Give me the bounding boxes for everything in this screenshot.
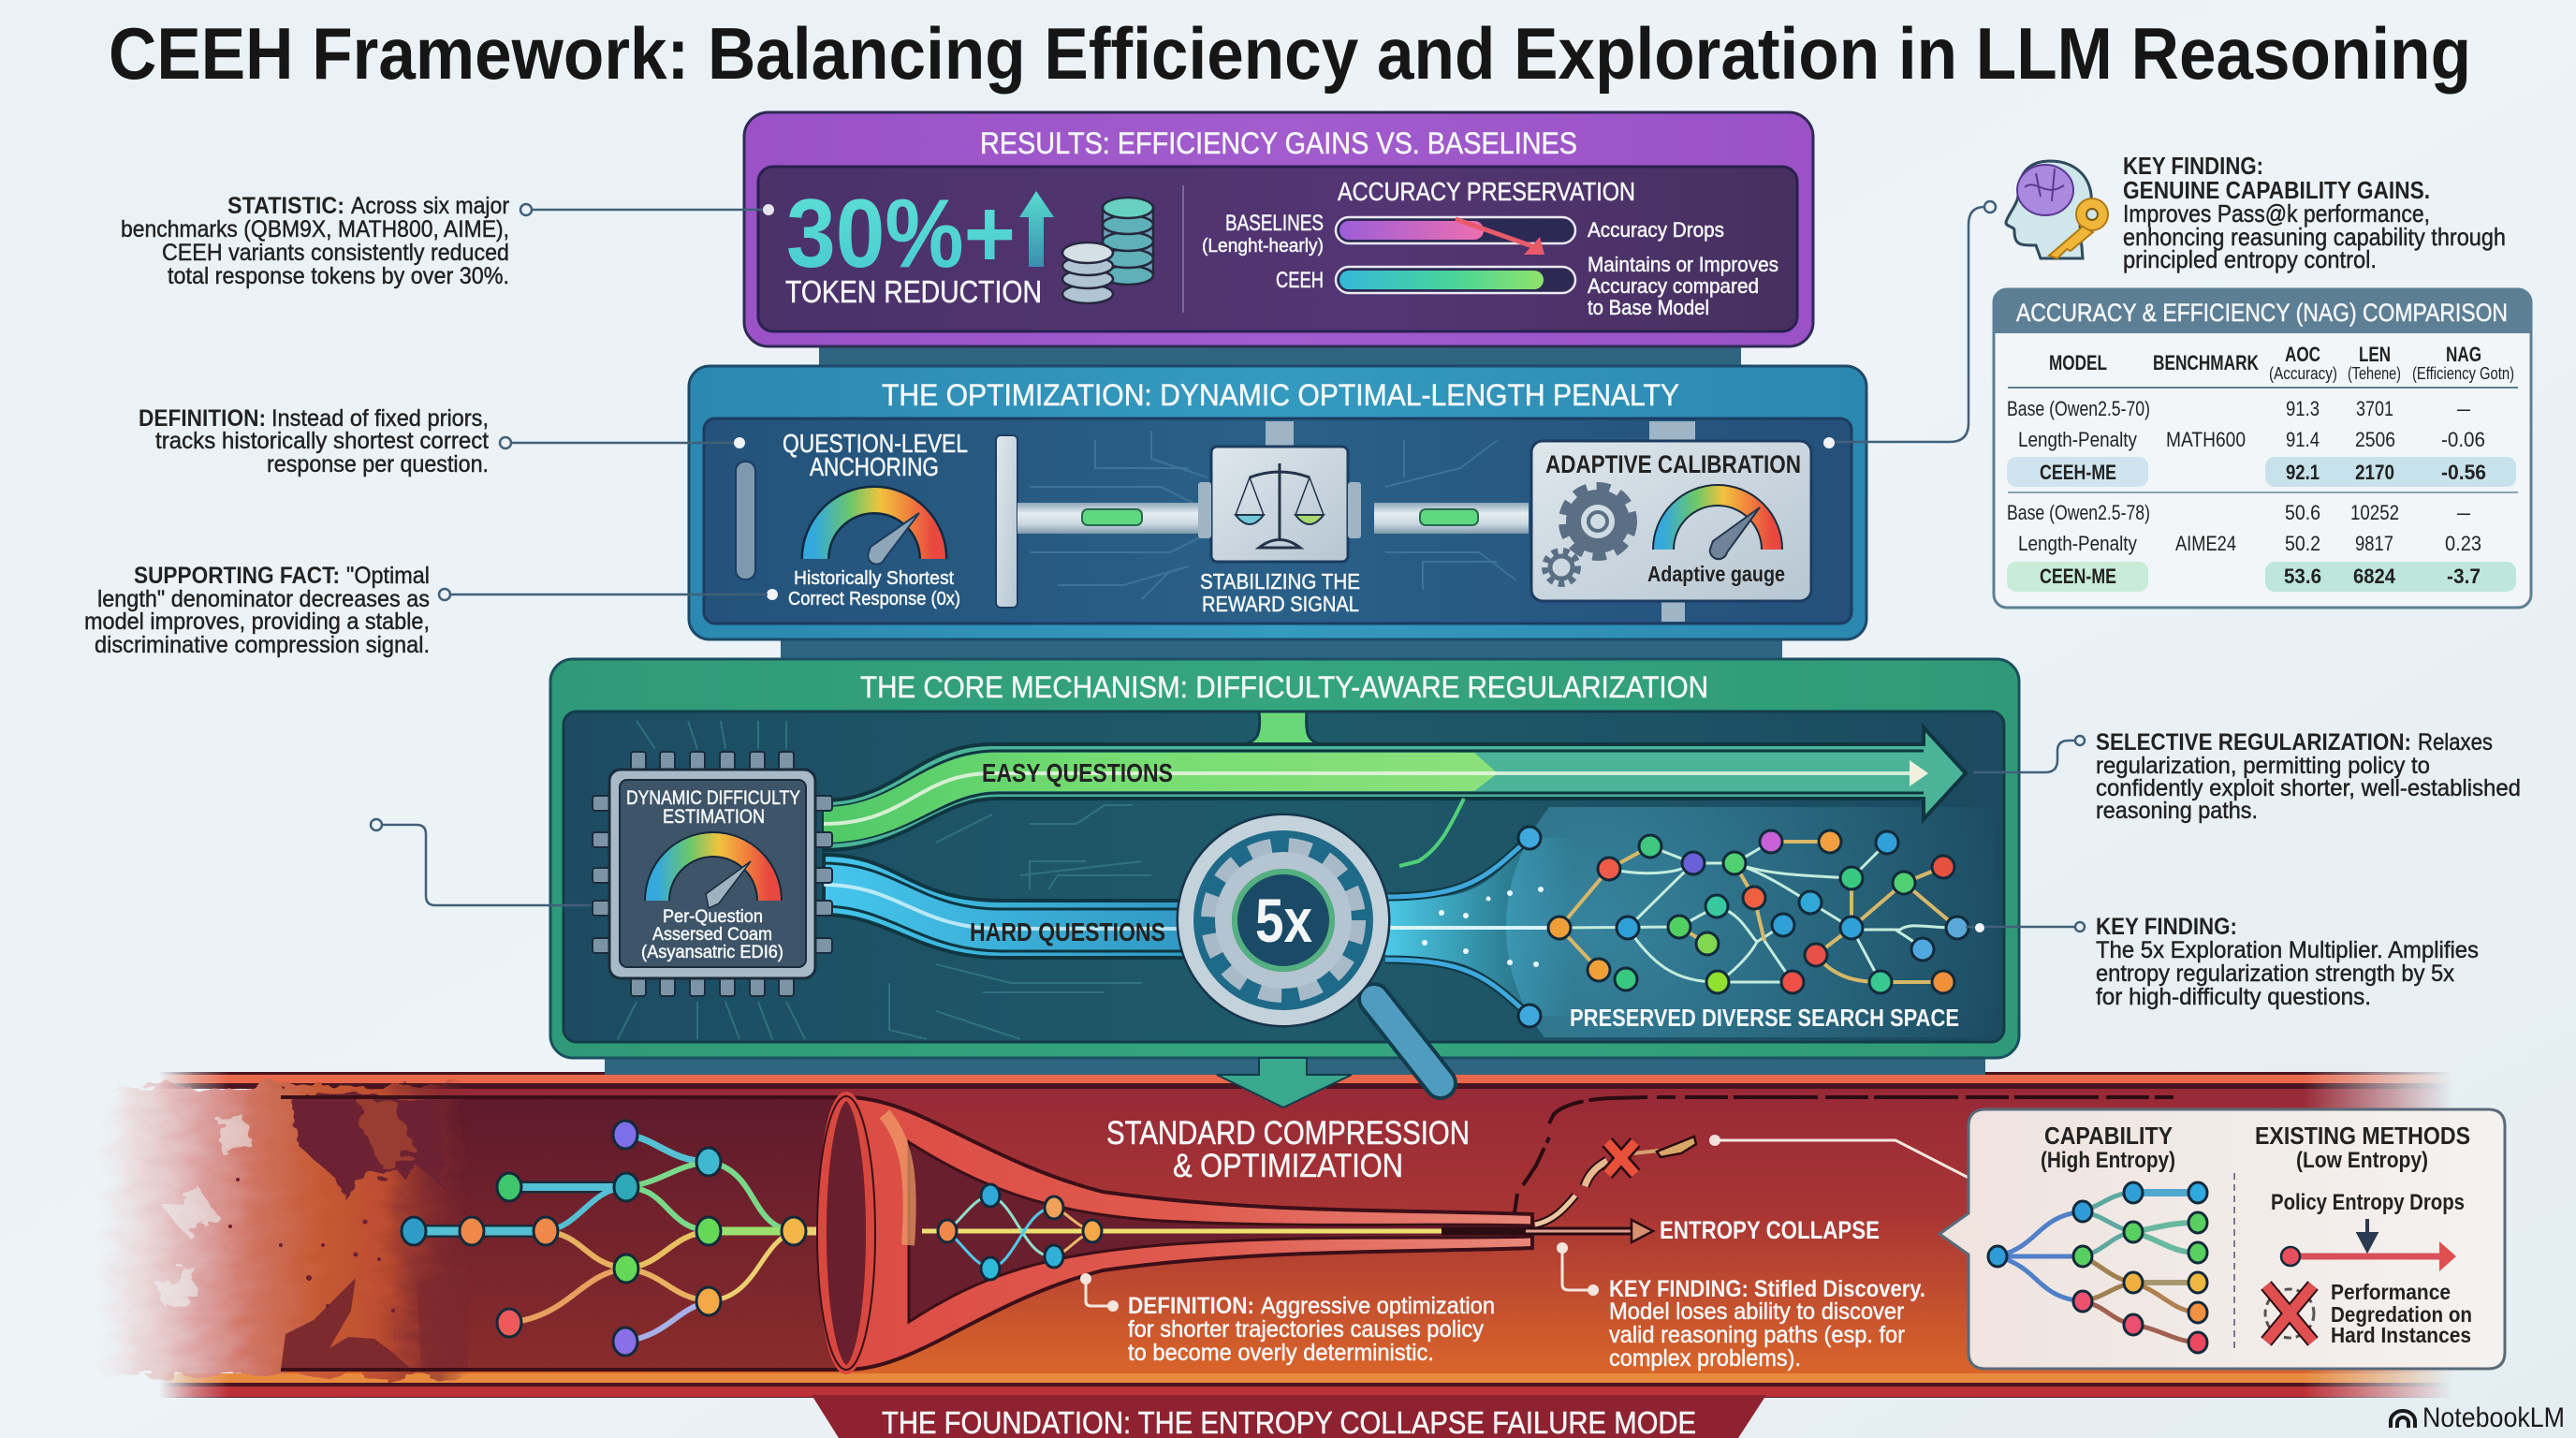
heading: optimization: THE OPTIMIZATION: DYNAMIC OPTIMAL-LENGTH PENALTY	[882, 378, 1679, 412]
glow behind graph	[1506, 807, 1998, 1037]
connector: difficulty estimation	[371, 819, 592, 905]
callout: key finding stifled discovery: valid reasoning paths (esp. for	[1609, 1322, 1905, 1348]
callout: statistic: Across six major	[351, 193, 509, 219]
bar: baselines accuracy	[1336, 217, 1575, 255]
heading: question-level anchoring: ANCHORING	[810, 452, 939, 481]
callout: statistic: total response tokens by over 30%.	[168, 263, 509, 289]
icon: magnifier with 5x gear	[1178, 814, 1441, 1083]
table rows: math600: Length-Penalty	[2018, 428, 2137, 451]
icon: gears	[1546, 488, 1632, 582]
table rows: math600: 2506	[2355, 428, 2395, 451]
diverse search graph	[1518, 827, 1969, 1027]
icon: balance scale box	[1198, 447, 1361, 562]
key finding: genuine capability gains: GENUINE CAPABILITY GAINS.	[2123, 176, 2430, 204]
gauge: historically shortest	[815, 500, 933, 565]
panel: optimization penalty	[689, 366, 1866, 639]
callout: key finding 5x multiplier: The 5x Exploration Multiplier. Amplifies	[2096, 937, 2479, 963]
heading: core mechanism: THE CORE MECHANISM: DIFFICULTY-AWARE REGULARIZATION	[860, 670, 1708, 704]
funnel: standard compression	[817, 1096, 1532, 1370]
table column headers	[2049, 343, 2514, 383]
callout: key finding stifled discovery: complex problems).	[1609, 1345, 1801, 1372]
label: ceeh: CEEH	[1276, 268, 1324, 293]
callout: definition	[139, 405, 734, 477]
callout: key finding 5x multiplier: KEY FINDING:	[2096, 914, 2237, 940]
table rows: math600	[2007, 397, 2486, 484]
label: entropy collapse: ENTROPY COLLAPSE	[1660, 1216, 1880, 1244]
table rows: aime24: 10252	[2350, 501, 2399, 524]
callout: definition: Aggressive optimization	[1261, 1293, 1495, 1319]
bottom tab heading	[812, 1395, 1766, 1438]
text: performance degradation	[2331, 1280, 2472, 1347]
table rows: math600: MATH600	[2166, 428, 2246, 451]
connector: key finding to optimization	[1835, 201, 1996, 442]
path: easy questions	[824, 712, 1966, 866]
table column headers: LEN	[2359, 343, 2391, 366]
caption: stabilizing the reward signal: REWARD SIGNAL	[1202, 592, 1359, 616]
caption: stabilizing the reward signal	[1200, 569, 1360, 616]
caption: per-question estimate	[641, 907, 783, 962]
table rows: aime24: 53.6	[2284, 565, 2321, 588]
callout: selective regularization: SELECTIVE REGULARIZATION:	[2096, 729, 2411, 756]
callout: statistic: CEEH variants consistently reduced	[162, 240, 509, 266]
caption: stabilizing the reward signal: STABILIZING THE	[1200, 569, 1360, 594]
circuit traces	[618, 721, 1151, 1039]
text: performance degradation: Hard Instances	[2331, 1323, 2471, 1347]
table rows: math600: 2170	[2355, 461, 2394, 484]
table rows: aime24: 50.6	[2285, 501, 2320, 524]
callout: definition: for shorter trajectories causes policy	[1128, 1316, 1484, 1343]
table rows: aime24: 9817	[2355, 532, 2393, 555]
heading: existing methods: (Low Entropy)	[2296, 1148, 2428, 1173]
label: 5x multiplier: 5x	[1255, 886, 1312, 955]
row highlights	[2007, 457, 2516, 592]
label: preserved diverse search space: PRESERVED DIVERSE SEARCH SPACE	[1570, 1004, 1959, 1032]
card: capability vs existing methods	[1939, 1109, 2505, 1369]
gauge: difficulty	[657, 844, 769, 908]
bar: ceeh accuracy	[1336, 267, 1575, 293]
text: maintains accuracy: Accuracy compared	[1588, 274, 1759, 298]
text: performance degradation: Performance	[2331, 1280, 2451, 1304]
callout: definition: response per question.	[267, 451, 489, 477]
callout: key finding 5x multiplier	[1966, 914, 2479, 1010]
heading: dynamic difficulty estimation: ESTIMATION	[663, 806, 765, 828]
table rows: math600: 92.1	[2286, 461, 2320, 484]
callout: statistic: benchmarks (QBM9X, MATH800, AIME),	[121, 216, 509, 242]
caption: adaptive gauge: Adaptive gauge	[1647, 562, 1785, 586]
table column headers: AOC	[2285, 343, 2320, 366]
table rows: aime24: 0.23	[2445, 532, 2481, 555]
heading: capability	[2041, 1122, 2175, 1173]
callout: supporting fact: model improves, providing a stable,	[84, 609, 430, 635]
caption: historically shortest	[788, 568, 960, 609]
table rows: math600: -0.56	[2441, 461, 2486, 484]
callout: supporting fact	[84, 563, 768, 658]
key finding: genuine capability gains: Improves Pass@k performance,	[2123, 199, 2430, 227]
card: adaptive calibration	[1531, 441, 1811, 601]
heading: accuracy preservation: ACCURACY PRESERVATION	[1338, 177, 1635, 206]
foundation panel: entropy collapse failure mode	[94, 1072, 2505, 1438]
text: maintains accuracy: Maintains or Improves	[1588, 253, 1778, 276]
table column headers: NAG	[2446, 343, 2481, 366]
table rows: math600: -0.06	[2441, 428, 2485, 451]
text: performance degradation: Degredation on	[2331, 1302, 2472, 1327]
table rows: aime24: 6824	[2353, 565, 2396, 588]
table rows: aime24	[2007, 501, 2481, 588]
key finding: genuine capability gains: KEY FINDING:	[2123, 152, 2263, 180]
callout: supporting fact: "Optimal	[346, 563, 430, 589]
caption: historically shortest: Historically Shortest	[794, 568, 954, 589]
statistic: 30% token reduction: 30%+	[786, 180, 1016, 288]
callout: supporting fact: length" denominator decreases as	[97, 586, 430, 612]
label: policy entropy drops: Policy Entropy Drops	[2271, 1190, 2465, 1215]
icon: crossed gear	[2265, 1285, 2314, 1342]
callout: key finding 5x multiplier: for high-difficulty questions.	[2096, 984, 2371, 1010]
callout: definition: tracks historically shortest correct	[155, 428, 489, 454]
callout: statistic	[121, 193, 774, 289]
heading: results: RESULTS: EFFICIENCY GAINS VS. BASELINES	[980, 126, 1577, 160]
table rows: math600: —	[2457, 397, 2470, 420]
heading: standard compression: & OPTIMIZATION	[1173, 1148, 1403, 1184]
high entropy tree diagram	[1988, 1182, 2207, 1353]
table: accuracy and efficiency comparison	[1994, 289, 2531, 608]
callout: definition	[1080, 1273, 1495, 1366]
table column headers: (Tehene)	[2348, 364, 2401, 383]
caption: per-question estimate: Per-Question	[663, 907, 763, 927]
heading: standard compression: STANDARD COMPRESSION	[1106, 1115, 1470, 1152]
label: hard questions: HARD QUESTIONS	[970, 917, 1165, 946]
callout: definition: DEFINITION:	[139, 405, 266, 432]
table rows: math600: CEEH-ME	[2040, 461, 2116, 484]
heading: dynamic difficulty estimation: DYNAMIC DIFFICULTY	[626, 787, 800, 809]
down arrow between core mechanism and foundation	[1217, 1058, 1352, 1108]
label: baselines: BASELINES	[1225, 211, 1324, 236]
table column headers: BENCHMARK	[2153, 351, 2259, 374]
heading: existing methods	[2255, 1122, 2470, 1173]
label: baselines	[1202, 211, 1324, 257]
heading: existing methods: EXISTING METHODS	[2255, 1122, 2470, 1150]
red band background	[112, 1072, 2482, 1398]
callout: selective regularization: regularization, permitting policy to	[2096, 753, 2430, 779]
callout: supporting fact: SUPPORTING FACT:	[134, 563, 340, 589]
heading: capability: CAPABILITY	[2044, 1122, 2173, 1150]
text: maintains accuracy	[1588, 253, 1778, 319]
panel: core mechanism	[550, 659, 2019, 1058]
text: accuracy drops: Accuracy Drops	[1588, 218, 1724, 242]
circuit traces	[1030, 431, 1516, 599]
table rows: aime24: Length-Penalty	[2018, 532, 2137, 555]
table rows: math600: 3701	[2356, 397, 2393, 420]
caption: historically shortest: Correct Response (0x)	[788, 589, 960, 609]
callout: selective regularization: reasoning paths.	[2096, 798, 2258, 824]
callout: key finding 5x multiplier: entropy regularization strength by 5x	[2096, 961, 2454, 987]
table column headers: (Accuracy)	[2269, 364, 2337, 383]
heading: capability: (High Entropy)	[2041, 1148, 2175, 1173]
caption: per-question estimate: (Asyansatric EDI6)	[641, 943, 783, 962]
label: easy questions: EASY QUESTIONS	[982, 758, 1173, 787]
icon: brain and key	[2006, 161, 2108, 258]
callout: selective regularization: confidently exploit shorter, well-established	[2096, 775, 2521, 801]
callout: selective regularization	[1973, 729, 2521, 824]
callout: key finding stifled discovery: Model loses ability to discover	[1609, 1299, 1904, 1325]
gauge: adaptive	[1663, 495, 1772, 559]
table column headers: MODEL	[2049, 351, 2107, 374]
heading: question-level anchoring: QUESTION-LEVEL	[783, 429, 968, 458]
text: maintains accuracy: to Base Model	[1588, 296, 1709, 319]
table rows: math600: 91.4	[2286, 428, 2320, 451]
pipe assembly	[996, 421, 1695, 622]
table rows: aime24: AIME24	[2175, 532, 2236, 555]
callout: definition: DEFINITION:	[1128, 1293, 1254, 1319]
callout: definition: to become overly deterministic.	[1128, 1340, 1434, 1366]
table rows: math600: 91.3	[2286, 397, 2320, 420]
icon: down arrow	[2359, 1219, 2376, 1250]
icon: token coin stacks	[1062, 198, 1153, 303]
table column headers: (Efficiency Gotn)	[2412, 364, 2514, 383]
table rows: aime24: 50.2	[2285, 532, 2320, 555]
heading: standard compression	[1106, 1115, 1470, 1184]
callout: key finding stifled discovery: KEY FINDING: Stifled Discovery.	[1609, 1276, 1925, 1302]
key finding: genuine capability gains: enhoncing reasuning capability through	[2123, 223, 2506, 251]
panel: results efficiency gains	[744, 112, 1813, 346]
table rows: aime24: Base (Owen2.5-78)	[2007, 501, 2150, 524]
leader line to comparison card	[1709, 1135, 1969, 1178]
table rows: aime24: —	[2457, 501, 2470, 524]
statistic: 30% token reduction: TOKEN REDUCTION	[785, 274, 1042, 309]
heading: dynamic difficulty estimation	[626, 787, 800, 828]
callout: selective regularization: Relaxes	[2418, 729, 2493, 756]
key finding: genuine capability gains	[2123, 152, 2506, 273]
heading: question-level anchoring	[783, 429, 968, 481]
label: baselines: (Lenght-hearly)	[1202, 236, 1324, 257]
caption: per-question estimate: Assersed Coam	[652, 925, 772, 945]
key finding: genuine capability gains: principled entropy control.	[2123, 245, 2377, 273]
chip: dynamic difficulty estimation	[593, 752, 832, 996]
path: hard questions	[824, 838, 1591, 1016]
table rows: aime24: CEEN-ME	[2040, 565, 2116, 588]
callout: definition: Instead of fixed priors,	[271, 405, 489, 432]
left capsule	[736, 462, 755, 580]
table rows: aime24: -3.7	[2447, 565, 2481, 588]
entropy collapse arrow and broken path	[1442, 1097, 2174, 1242]
left tube with branching graph	[94, 1086, 858, 1376]
icon: falling entropy arrow	[2281, 1241, 2456, 1271]
callout: key finding stifled discovery	[1557, 1242, 1925, 1372]
callout: statistic: STATISTIC:	[227, 193, 344, 219]
table rows: math600: Base (Owen2.5-70)	[2007, 397, 2150, 420]
connector bars	[605, 345, 1985, 1075]
callout: supporting fact: discriminative compression signal.	[95, 632, 430, 658]
heading: adaptive calibration: ADAPTIVE CALIBRATION	[1545, 450, 1801, 478]
